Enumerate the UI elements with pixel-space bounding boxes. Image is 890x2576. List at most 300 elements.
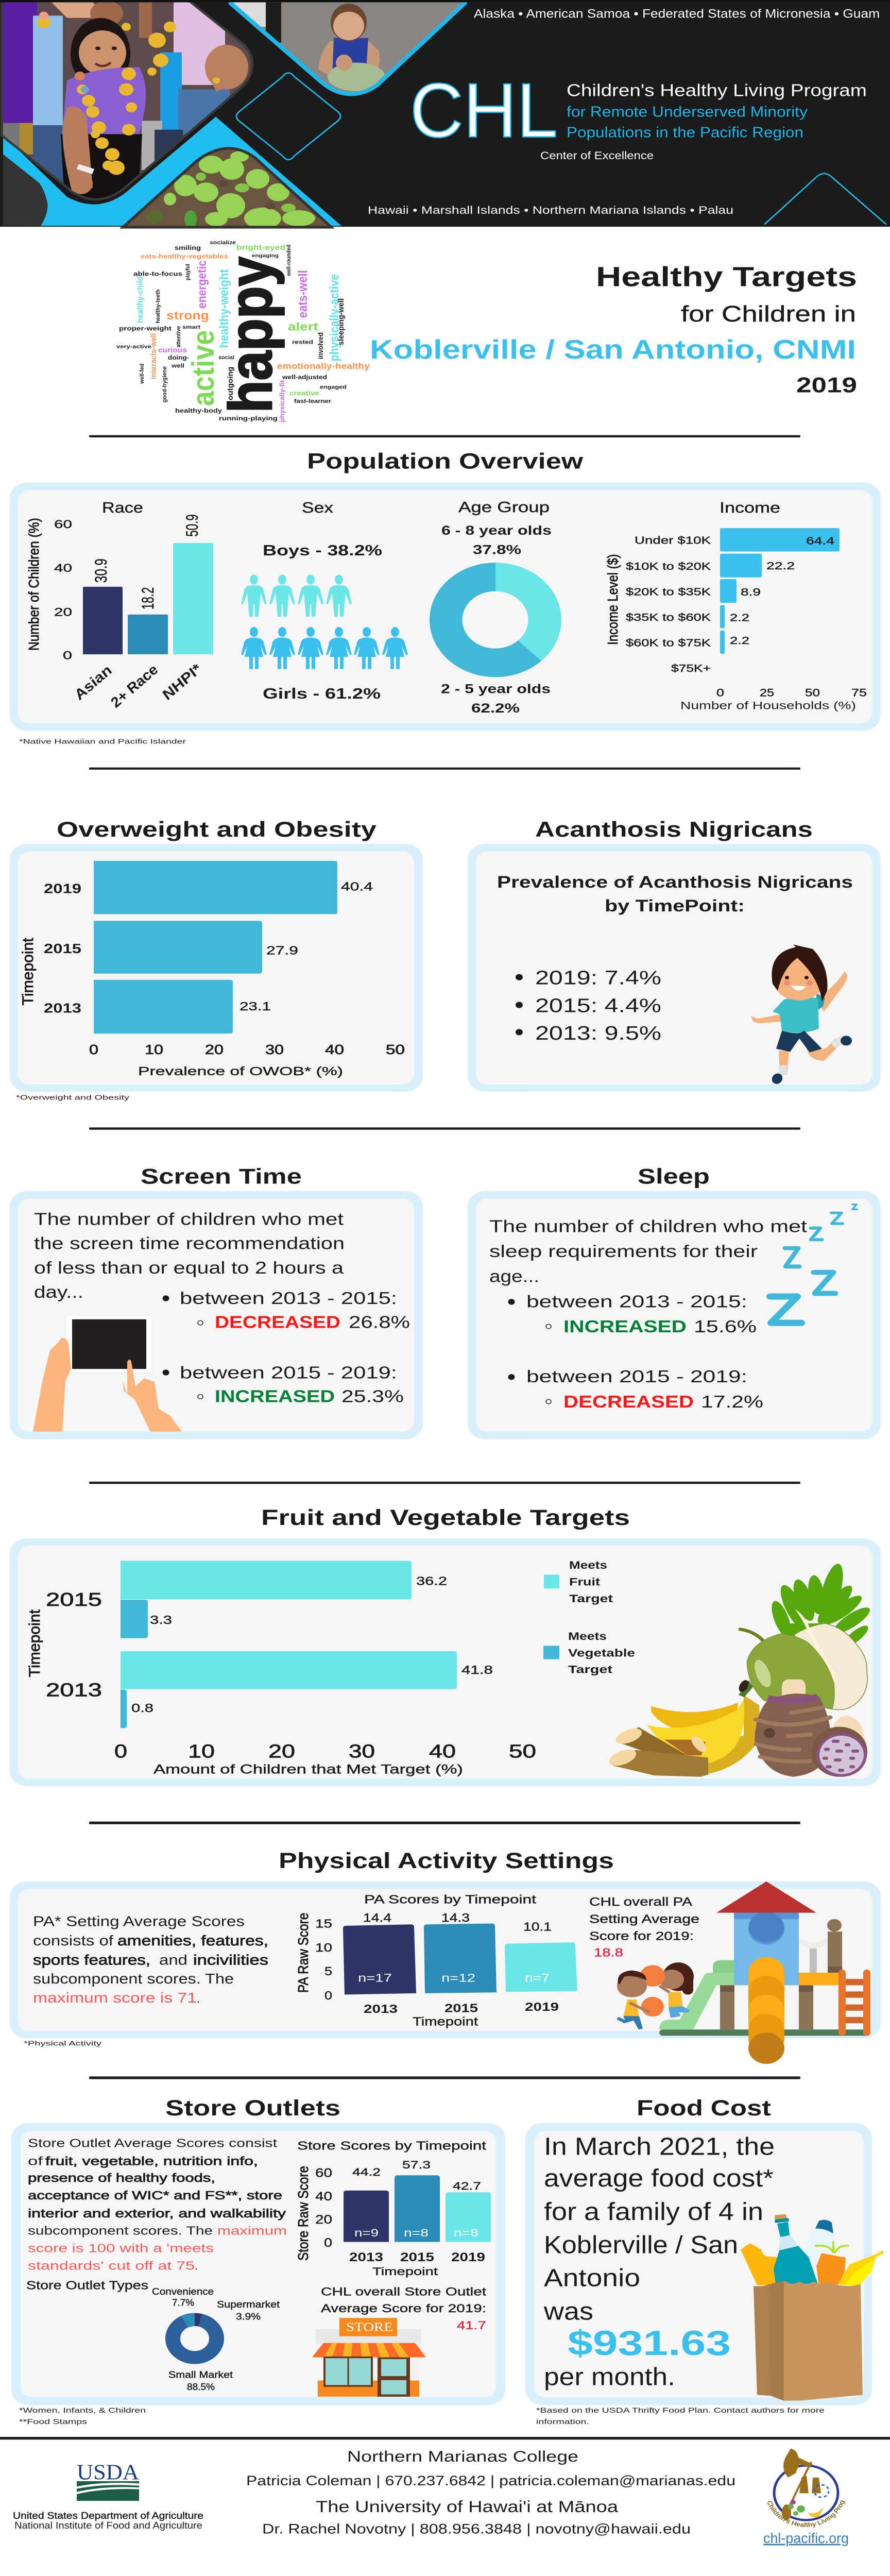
text: PA description: maximum score is 71 (33, 1990, 197, 2006)
footnote: food cost (536, 2406, 825, 2426)
callout: CHL overall PA score: CHL overall PA (589, 1895, 692, 1908)
donut chart: age group: 37.8% (473, 542, 521, 557)
word cloud: well-adjusted (282, 374, 327, 381)
footnote: OWOB: *Overweight and Obesity (16, 1093, 129, 1101)
jurisdictions bottom: Hawaii • Marshall Islands • Northern Mariana Islands • Palau (368, 204, 733, 216)
program name: Children's Healthy Living Program (567, 81, 867, 100)
bar chart: OWOB prevalence: 20 (205, 1042, 224, 1057)
bar chart: OWOB prevalence: 40.4 (341, 880, 373, 893)
bar chart: store scores: Store Raw Score (295, 2166, 311, 2261)
word cloud: eats-well (296, 270, 310, 318)
text: PA description: and (159, 1952, 187, 1968)
bar chart: fruit and vegetable targets: 3.3 (150, 1614, 172, 1626)
bar chart: fruit and vegetable targets: 50 (509, 1741, 536, 1762)
footnote: food cost: *Based on the USDA Thrifty Food Plan. Contact authors for more (536, 2406, 825, 2415)
icon: running boy (751, 944, 852, 1086)
bar chart: income: 50 (805, 687, 820, 699)
icon: breadfruit, banana, taro (606, 1562, 874, 1777)
bar chart: store scores: Timepoint (372, 2265, 438, 2277)
bar chart: fruit and vegetable targets: 2015 (46, 1589, 102, 1611)
bar chart: PA scores: 10 (315, 1941, 332, 1955)
text: screen time intro (34, 1210, 345, 1302)
text: food cost statement: for a family of 4 in (544, 2198, 763, 2226)
word cloud: active (186, 330, 220, 406)
bar chart: race: 0 (63, 649, 72, 662)
bar chart: store scores: n=9 (354, 2227, 379, 2239)
bar chart: OWOB prevalence: 0 (89, 1042, 98, 1057)
bar chart: income: Number of Households (%) (680, 700, 856, 711)
bar chart: PA scores: n=17 (358, 1972, 392, 1985)
logo: USDA (13, 2460, 203, 2531)
bar chart: PA scores: n=12 (441, 1972, 475, 1985)
bar chart: OWOB prevalence: 10 (145, 1042, 163, 1057)
list: sleep changes: 17.2% (701, 1392, 763, 1411)
bar chart: OWOB prevalence: 27.9 (266, 944, 298, 957)
list: prevalence values: 2015: 4.4% (535, 994, 661, 1016)
bar chart: OWOB prevalence: 50 (386, 1042, 405, 1057)
cyan wedge (3, 117, 341, 226)
bar chart: income: $10K to $20K (626, 561, 711, 572)
donut chart: store outlet types: Small Market (168, 2370, 233, 2380)
text: PA description: incivilities (193, 1952, 268, 1968)
donut chart: store outlet types: 7.7% (172, 2298, 194, 2308)
bar chart: store scores (295, 2139, 491, 2277)
word cloud: interacts-well (149, 333, 158, 379)
word cloud: well (171, 362, 184, 369)
list: screen time changes: between 2015 - 2019: (180, 1363, 397, 1382)
subheading (497, 873, 853, 916)
bar chart: race: 20 (54, 606, 72, 619)
heading: Acanthosis Nigricans: Acanthosis Nigricans (535, 817, 813, 841)
bar chart: OWOB prevalence (19, 861, 405, 1078)
heading: Population Overview: Population Overview (307, 449, 583, 473)
heading: Overweight and Obesity: Overweight and Obesity (57, 817, 376, 841)
text: store description: fruit, vegetable, nutrition info, (45, 2155, 258, 2168)
icon: sleeping Zs (770, 1205, 857, 1323)
word cloud: rested (292, 338, 313, 345)
word cloud: running-playing (219, 415, 278, 422)
word cloud: outgoing (226, 367, 234, 400)
word cloud: bright-eyed (236, 244, 285, 252)
CHL logotype: CHL (410, 67, 558, 154)
word cloud: emotionally-healthy (277, 361, 370, 371)
child: boy with ball (617, 1971, 664, 2029)
bar chart: fruit and vegetable targets: 30 (349, 1741, 375, 1762)
donut chart: age group: 6 - 8 year olds (441, 523, 552, 538)
footnotes: store: **Food Stamps (19, 2418, 87, 2426)
bar chart: PA scores: PA Scores by Timepoint (364, 1893, 536, 1906)
bar chart: store scores: 57.3 (402, 2159, 431, 2171)
legend: Target (569, 1592, 613, 1605)
footnote: food cost: information. (536, 2418, 589, 2426)
callout: CHL overall PA score: Score for 2019: (589, 1929, 694, 1943)
bar chart: store scores: 20 (315, 2212, 332, 2227)
bar chart: PA scores: PA Raw Score (295, 1913, 311, 1993)
donut chart: age group: 62.2% (471, 701, 520, 715)
bar chart: race: 40 (54, 562, 72, 575)
list: screen time changes: INCREASED (215, 1387, 335, 1406)
logo: CHL program: Children's Healthy Living Program (767, 2500, 846, 2528)
list: prevalence values: 2019: 7.4% (535, 967, 661, 989)
callout: CHL overall PA score: Setting Average (589, 1912, 699, 1926)
word cloud: physically-fit (278, 380, 286, 422)
bar chart: income (604, 499, 867, 711)
bar chart: race: 30.9 (92, 558, 110, 583)
text: store description: subcomponent scores. The (28, 2224, 213, 2238)
text: PA description: subcomponent scores. The (33, 1971, 234, 1987)
word cloud: smart (182, 325, 200, 330)
panel: acanthosis nigricans (468, 844, 881, 1092)
word cloud: well-rounded (286, 245, 292, 277)
photo: girl with lei (0, 0, 258, 210)
bar chart: store scores: Store Scores by Timepoint (297, 2139, 486, 2153)
bar chart: fruit and vegetable targets: Amount of Children that Met Target (%) (153, 1762, 463, 1776)
word cloud: healthy-weight (217, 269, 231, 348)
bar chart: income: 64.4 (806, 535, 834, 547)
bar chart: store scores: 2013 (349, 2250, 383, 2264)
diamond outline (236, 73, 340, 160)
header banner (0, 0, 890, 229)
title block (370, 261, 857, 397)
donut chart: store outlet types: Convenience (152, 2286, 214, 2297)
bar chart: race: 60 (54, 518, 72, 531)
bar chart: income: Income Level ($) (604, 554, 621, 645)
legend: Meets (569, 1559, 607, 1571)
word cloud: energetic (195, 260, 209, 309)
icon: playground and children (617, 1882, 870, 2064)
bar chart: OWOB prevalence: 40 (325, 1042, 344, 1057)
triangle outline (764, 174, 886, 225)
footnotes: store (19, 2406, 146, 2426)
bar chart: OWOB prevalence: 2013 (44, 1001, 81, 1015)
program name: Center of Excellence (540, 149, 654, 162)
bar chart: store scores: 0 (324, 2235, 332, 2250)
text: store description: of (28, 2155, 43, 2168)
bar chart: OWOB prevalence: Timepoint (19, 938, 36, 1005)
bar chart: PA scores: 5 (324, 1965, 332, 1978)
bar chart: fruit and vegetable targets: 10 (188, 1741, 215, 1762)
subheading: Prevalence of Acanthosis Nigricans (497, 873, 853, 892)
legend: Fruit (569, 1575, 600, 1588)
bar chart: store scores: 44.2 (352, 2166, 381, 2178)
callout: CHL overall store score: 41.7 (457, 2319, 486, 2332)
icon: grocery bag (741, 2214, 884, 2401)
bar chart: fruit and vegetable targets: 40 (429, 1741, 456, 1762)
bar chart: store scores: 42.7 (453, 2180, 481, 2192)
bar chart: fruit and vegetable targets (26, 1561, 536, 1776)
word cloud: proper-weight (119, 325, 172, 332)
list: sleep changes: between 2013 - 2015: (526, 1292, 747, 1311)
word cloud: creative (289, 389, 319, 397)
text: sleep intro: sleep requirements for their (489, 1242, 758, 1261)
pictogram: sex: Girls - 61.2% (263, 685, 381, 702)
bar chart: income: $20K to $35K (626, 586, 711, 598)
contact details: Northern Marianas College (347, 2448, 578, 2465)
bar chart: income: 2.2 (730, 635, 749, 647)
heading: Sleep: Sleep (638, 1164, 710, 1189)
dark corner (3, 154, 47, 226)
bar chart: fruit and vegetable targets: 41.8 (461, 1664, 493, 1677)
bar chart: income: Under $10K (635, 535, 711, 546)
bar chart: income: $35K to $60K (626, 612, 711, 623)
list: sleep changes: 15.6% (694, 1317, 757, 1336)
bar chart: PA scores: 2015 (444, 2002, 478, 2015)
word cloud: physically-active (328, 274, 341, 361)
text: food cost statement: average food cost* (544, 2164, 774, 2192)
word cloud: healthy-child (135, 276, 145, 323)
title block: Healthy Targets (596, 261, 857, 293)
bar chart: fruit and vegetable targets: 20 (268, 1741, 295, 1762)
text: store description: . (195, 2259, 198, 2273)
bar chart: race: 50.9 (183, 514, 201, 537)
donut chart: store outlet types (26, 2279, 280, 2393)
text: food cost statement: In March 2021, the (544, 2133, 775, 2160)
logo: USDA: National Institute of Food and Agriculture (14, 2520, 202, 2531)
word cloud: engaging (252, 253, 279, 259)
bar chart: income: 75 (851, 687, 867, 699)
panel: sleep (468, 1191, 881, 1439)
bar chart: PA scores: 0 (324, 1989, 332, 2003)
heading: Fruit and Vegetable Targets: Fruit and Vegetable Targets (261, 1505, 630, 1530)
word cloud: strong (166, 309, 209, 322)
panel: food cost (525, 2123, 884, 2405)
word cloud: attentive (176, 326, 182, 347)
text: screen time intro: day... (34, 1282, 83, 1302)
text: PA description: consists of (33, 1933, 114, 1949)
list: prevalence values (516, 967, 661, 1044)
panel: physical activity settings (10, 1882, 881, 2064)
donut chart: store outlet types: Store Outlet Types (26, 2279, 148, 2292)
pictogram: sex: Boys - 38.2% (263, 542, 382, 559)
bar chart: store scores: 2015 (400, 2250, 434, 2264)
word cloud: sleeping-well (336, 298, 345, 345)
text: food cost statement: $931.63 (568, 2324, 731, 2363)
bar chart: income: 8.9 (741, 587, 761, 598)
bar chart: PA scores (295, 1893, 577, 2028)
bar chart: fruit and vegetable targets: 2013 (46, 1680, 102, 1701)
list: sleep changes (508, 1292, 763, 1411)
bar chart: PA scores: Timepoint (413, 2015, 478, 2028)
legend: Target (568, 1663, 612, 1675)
heading: Physical Activity Settings: Physical Activity Settings (279, 1848, 614, 1873)
footnote: population: *Native Hawaiian and Pacific Islander (19, 738, 186, 745)
text: store description (28, 2137, 287, 2273)
panel: store outlets (11, 2123, 505, 2405)
bar chart: OWOB prevalence: 23.1 (239, 1000, 271, 1013)
bar chart: OWOB prevalence: 2015 (44, 941, 81, 956)
legend (543, 1559, 635, 1675)
word cloud: very-active (116, 344, 151, 350)
title block: for Children in (681, 301, 856, 326)
heading: Store Outlets: Store Outlets (165, 2095, 340, 2120)
word cloud: fast-learner (294, 398, 331, 404)
bar chart: PA scores: 14.4 (363, 1911, 391, 1925)
title block: 2019 (796, 372, 857, 397)
bar chart: fruit and vegetable targets: 0.8 (131, 1702, 153, 1715)
word cloud: alert (288, 320, 318, 333)
callout: CHL overall store score: CHL overall Store Outlet (321, 2285, 486, 2298)
bar chart: income: 0 (716, 687, 724, 699)
text: store description: Store Outlet Average Scores consist (28, 2137, 277, 2150)
bar chart: race: 18.2 (139, 587, 157, 609)
text: food cost statement: was (543, 2298, 593, 2326)
text: PA description: sports features, (33, 1952, 150, 1968)
list: screen time changes (163, 1289, 410, 1406)
program name (540, 81, 867, 162)
word cloud: socialize (210, 240, 236, 246)
word cloud: healthy-teeth (155, 290, 161, 324)
text: sleep intro: The number of children who met (489, 1217, 807, 1236)
text: PA description: amenities, features, (117, 1933, 268, 1949)
list: screen time changes: between 2013 - 2015: (180, 1289, 397, 1308)
title block: Koblerville / San Antonio, CNMI (370, 334, 856, 364)
bar chart: race: NHPI* (158, 660, 206, 702)
text: store description: standards' cut off at 75 (28, 2259, 195, 2273)
contact details: Dr. Rachel Novotny | 808.956.3848 | novotny@hawaii.edu (262, 2521, 691, 2537)
bar chart: race (25, 499, 213, 710)
text: screen time intro: The number of children who met (34, 1210, 344, 1229)
donut chart: age group: Age Group (458, 499, 550, 515)
word cloud: engaged (320, 384, 347, 390)
photo: toddler with bag (232, 0, 463, 92)
logo: USDA: United States Department of Agriculture (13, 2511, 203, 2521)
bar chart: PA scores: n=7 (525, 1972, 550, 1985)
panel: overweight and obesity (10, 844, 423, 1092)
list: sleep changes: DECREASED (563, 1392, 694, 1411)
text: screen time intro: the screen time recommendation (34, 1234, 345, 1253)
text: PA description: PA* Setting Average Scores (33, 1914, 245, 1929)
program name: for Remote Underserved Minority (567, 104, 808, 120)
text: sleep intro (489, 1217, 807, 1286)
contact details: The University of Hawai'i at Mānoa (316, 2498, 618, 2516)
word cloud: involved (316, 332, 324, 359)
donut chart: store outlet types: 88.5% (187, 2382, 215, 2393)
bar chart: OWOB prevalence: 30 (265, 1042, 284, 1057)
text: food cost statement (543, 2133, 775, 2391)
list: screen time changes: DECREASED (215, 1313, 340, 1332)
legend: Vegetable (568, 1647, 635, 1659)
bar chart: race: Race (102, 499, 143, 516)
word cloud: healthy-body (175, 407, 222, 414)
word cloud: able-to-focus (133, 270, 182, 277)
text: PA description: . (197, 1990, 200, 2006)
word cloud: smiling (175, 244, 201, 251)
program name: Populations in the Pacific Region (567, 124, 803, 141)
contact details (246, 2448, 735, 2537)
pictogram: sex: Sex (302, 499, 334, 516)
bar chart: store scores: n=8 (454, 2227, 478, 2239)
frame edge (0, 0, 890, 2)
bar chart: income: 2.2 (730, 612, 749, 623)
bar chart: income: 22.2 (766, 560, 795, 572)
photo: lettuce garden (124, 143, 330, 229)
callout: CHL overall store score: Average Score for 2019: (321, 2302, 486, 2315)
bar chart: PA scores: 2019 (525, 2000, 559, 2013)
child: girl with ball (640, 1962, 694, 2018)
text: store description: score is 100 with a 'meets (28, 2242, 214, 2255)
bar chart: PA scores: 14.3 (441, 1911, 470, 1925)
bar chart: PA scores: 2013 (364, 2003, 398, 2016)
subheading: by TimePoint: (605, 897, 745, 916)
bar chart: PA scores: 15 (315, 1917, 332, 1930)
text: store description: presence of healthy foods, (28, 2172, 215, 2185)
word cloud: happy (217, 257, 285, 413)
icon: hands holding tablet (33, 1315, 182, 1432)
list: screen time changes: 26.8% (349, 1313, 410, 1332)
bar chart: income: Income (720, 499, 780, 516)
text: food cost statement: per month. (544, 2363, 675, 2391)
contact details: Patricia Coleman | 670.237.6842 | patricia.coleman@marianas.edu (246, 2473, 735, 2488)
bar chart: PA scores: 10.1 (523, 1920, 552, 1934)
panel: population overview (10, 483, 881, 731)
bar chart: fruit and vegetable targets: Timepoint (26, 1609, 43, 1677)
word cloud: playful (185, 264, 191, 280)
panel: screen time (10, 1191, 423, 1439)
donut chart: store outlet types: Supermarket (217, 2299, 280, 2310)
bar chart: fruit and vegetable targets: 0 (114, 1741, 127, 1762)
callout: CHL overall store score (321, 2285, 486, 2332)
word cloud: social (218, 355, 234, 361)
bar chart: race: Number of Children (%) (25, 518, 42, 651)
word cloud: well-fed (139, 364, 145, 384)
heading: Screen Time: Screen Time (141, 1164, 302, 1189)
panel: fruit and vegetable targets (10, 1538, 881, 1786)
legend: Meets (568, 1630, 607, 1642)
donut chart: store outlet types: 3.9% (236, 2312, 261, 2322)
footnotes: store: *Women, Infants, & Children (19, 2406, 146, 2415)
text: store description: maximum (217, 2224, 287, 2238)
callout: CHL overall PA score (589, 1895, 699, 1959)
list: prevalence values: 2013: 9.5% (535, 1022, 661, 1044)
bar chart: income: $75K+ (671, 663, 711, 674)
text: food cost statement: Koblerville / San (544, 2231, 738, 2259)
list: sleep changes: between 2015 - 2019: (526, 1367, 747, 1386)
word cloud: good-hygiene (162, 366, 168, 402)
bar chart: income: 25 (760, 687, 774, 699)
text: food cost statement: Antonio (544, 2264, 640, 2292)
bar chart: race: 2+ Race (106, 662, 162, 710)
bar chart: store scores: 40 (315, 2189, 332, 2203)
word cloud: doing- (168, 354, 189, 361)
bar chart: store scores: n=8 (404, 2227, 429, 2239)
list: sleep changes: INCREASED (563, 1317, 687, 1336)
donut chart: age group: 2 - 5 year olds (441, 681, 551, 696)
bar chart: fruit and vegetable targets: 36.2 (416, 1574, 447, 1588)
bar chart: OWOB prevalence: 2019 (44, 881, 81, 896)
logo: USDA: USDA (77, 2460, 139, 2484)
text: sleep intro: age... (489, 1267, 539, 1286)
logo: CHL program: chl-pacific.org (763, 2531, 849, 2546)
list: screen time changes: 25.3% (341, 1387, 404, 1406)
icon: storefront (312, 2318, 426, 2397)
word cloud: curious (158, 346, 187, 354)
bar chart: race: Asian (70, 663, 116, 703)
word cloud: eats-healthy-vegetables (141, 253, 228, 260)
heading: Food Cost: Food Cost (637, 2095, 771, 2120)
text: PA description (33, 1914, 268, 2006)
word cloud (116, 240, 370, 422)
bar chart: OWOB prevalence: Prevalence of OWOB* (%) (138, 1064, 343, 1078)
bar chart: store scores: 60 (315, 2165, 332, 2180)
pictogram: sex (241, 499, 408, 702)
callout: CHL overall PA score: 18.8 (594, 1946, 623, 1959)
text: store description: interior and exterior, and walkability (28, 2207, 286, 2220)
icon: storefront: STORE (346, 2320, 393, 2334)
text: store description: acceptance of WIC* and FS**, store (28, 2189, 282, 2202)
text: screen time intro: of less than or equal to 2 hours a (34, 1259, 344, 1278)
footnote: PA: *Physical Activity (24, 2039, 101, 2047)
donut chart: age group (430, 499, 561, 715)
